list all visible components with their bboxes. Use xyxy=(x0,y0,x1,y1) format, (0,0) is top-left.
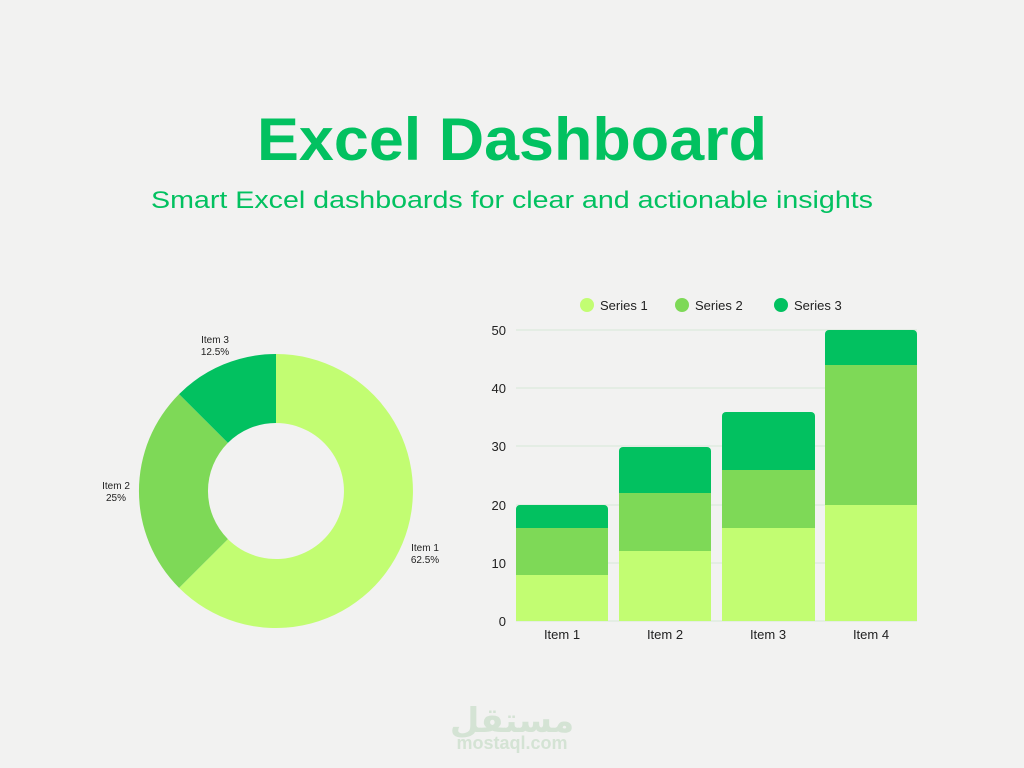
watermark: mostaql.com xyxy=(456,733,568,753)
bar: item 2 xyxy=(619,447,711,621)
label: item 2: 25% xyxy=(106,493,126,504)
segment: item 3 xyxy=(179,354,276,443)
y axis labels xyxy=(492,323,506,629)
y axis labels: 40 xyxy=(492,381,506,396)
watermark: مستقل xyxy=(450,693,574,742)
bar: item 4 xyxy=(825,330,917,621)
x axis labels xyxy=(544,627,889,642)
y axis labels: 50 xyxy=(492,323,506,338)
segment: item 1 xyxy=(179,354,413,628)
bar chart xyxy=(492,298,917,642)
label: item 3 xyxy=(201,335,229,358)
y axis labels: 0 xyxy=(499,614,506,629)
label: item 2 xyxy=(102,481,130,504)
label: item 2: Item 2 xyxy=(102,481,130,492)
label: item 1: Item 1 xyxy=(411,543,439,554)
x axis labels: Item 3 xyxy=(750,627,786,642)
legend xyxy=(580,298,842,313)
bar: item 1 xyxy=(516,505,608,621)
subtitle: Smart Excel dashboards for clear and actionable insights xyxy=(151,187,873,214)
label: item 3: Item 3 xyxy=(201,335,229,346)
label: item 1: 62.5% xyxy=(411,555,439,566)
x axis labels: Item 2 xyxy=(647,627,683,642)
x axis labels: Item 4 xyxy=(853,627,889,642)
legend: Series 3 xyxy=(794,298,842,313)
y axis labels: 10 xyxy=(492,556,506,571)
segment: item 2 xyxy=(139,394,228,588)
legend: Series 1 xyxy=(600,298,648,313)
x axis labels: Item 1 xyxy=(544,627,580,642)
y axis labels: 20 xyxy=(492,498,506,513)
bar: item 3 xyxy=(722,412,815,621)
legend: Series 2 xyxy=(695,298,743,313)
y axis labels: 30 xyxy=(492,439,506,454)
label: item 3: 12.5% xyxy=(201,347,229,358)
donut chart xyxy=(102,335,439,628)
label: item 1 xyxy=(411,543,439,566)
title: Excel Dashboard xyxy=(257,106,767,173)
